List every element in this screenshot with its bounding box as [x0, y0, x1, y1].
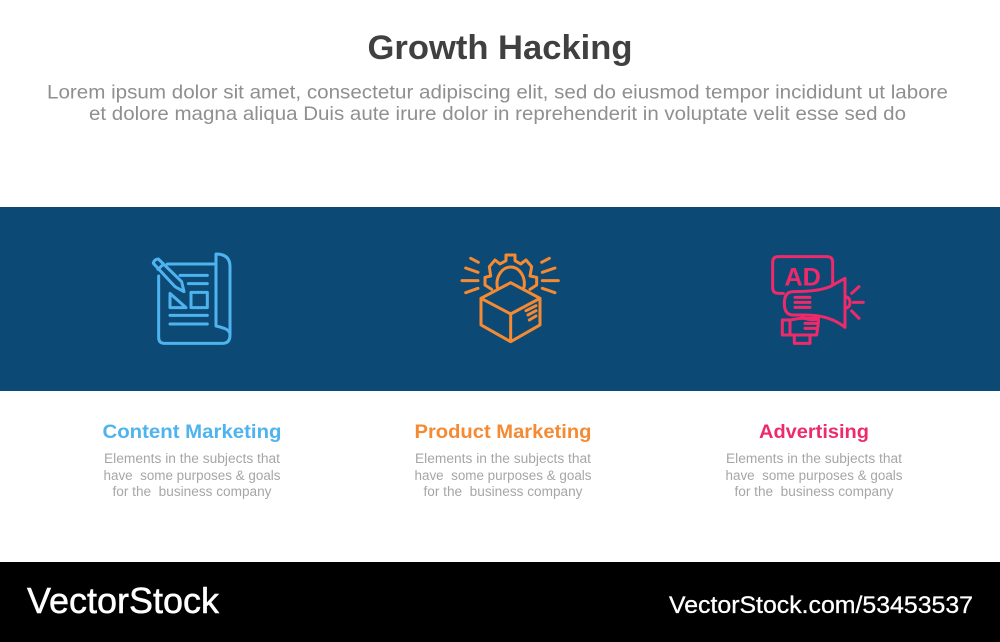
footer logo text: VectorStock [27, 580, 220, 621]
icon: advertising megaphone: AD [784, 264, 821, 292]
heading: content marketing: Content Marketing [102, 421, 282, 443]
text: advertising description: for the business company [734, 484, 894, 499]
intro paragraph: Lorem ipsum dolor sit amet, consectetur adipiscing elit, sed do eiusmod tempor incididunt ut labore [47, 82, 948, 104]
text: product marketing description: for the business company [424, 484, 583, 499]
title: Growth Hacking [368, 29, 632, 67]
icon: product marketing box and gear [462, 255, 558, 342]
intro paragraph [47, 82, 948, 125]
footer bar [0, 562, 1000, 642]
column: content marketing [102, 421, 282, 499]
text: advertising description [726, 451, 903, 499]
text: content marketing description [104, 451, 281, 499]
icon: advertising megaphone [773, 257, 863, 343]
column: product marketing [414, 421, 592, 499]
heading: product marketing: Product Marketing [414, 421, 592, 443]
text: product marketing description: have some purposes & goals [414, 468, 592, 483]
footer url: VectorStock.com/53453537 [669, 592, 973, 619]
icon: content marketing document [153, 254, 230, 343]
intro paragraph: et dolore magna aliqua Duis aute irure dolor in reprehenderit in voluptate velit esse sed do [89, 103, 906, 125]
panel: icon band [0, 207, 1000, 391]
text: content marketing description: Elements in the subjects that [104, 451, 280, 466]
text: advertising description: have some purposes & goals [726, 468, 903, 483]
text: product marketing description: Elements in the subjects that [415, 451, 591, 466]
text: product marketing description [414, 451, 592, 499]
text: advertising description: Elements in the subjects that [726, 451, 902, 466]
column: advertising [726, 421, 903, 499]
heading: advertising: Advertising [759, 421, 869, 443]
text: content marketing description: for the business company [112, 484, 272, 499]
text: content marketing description: have some purposes & goals [104, 468, 281, 483]
